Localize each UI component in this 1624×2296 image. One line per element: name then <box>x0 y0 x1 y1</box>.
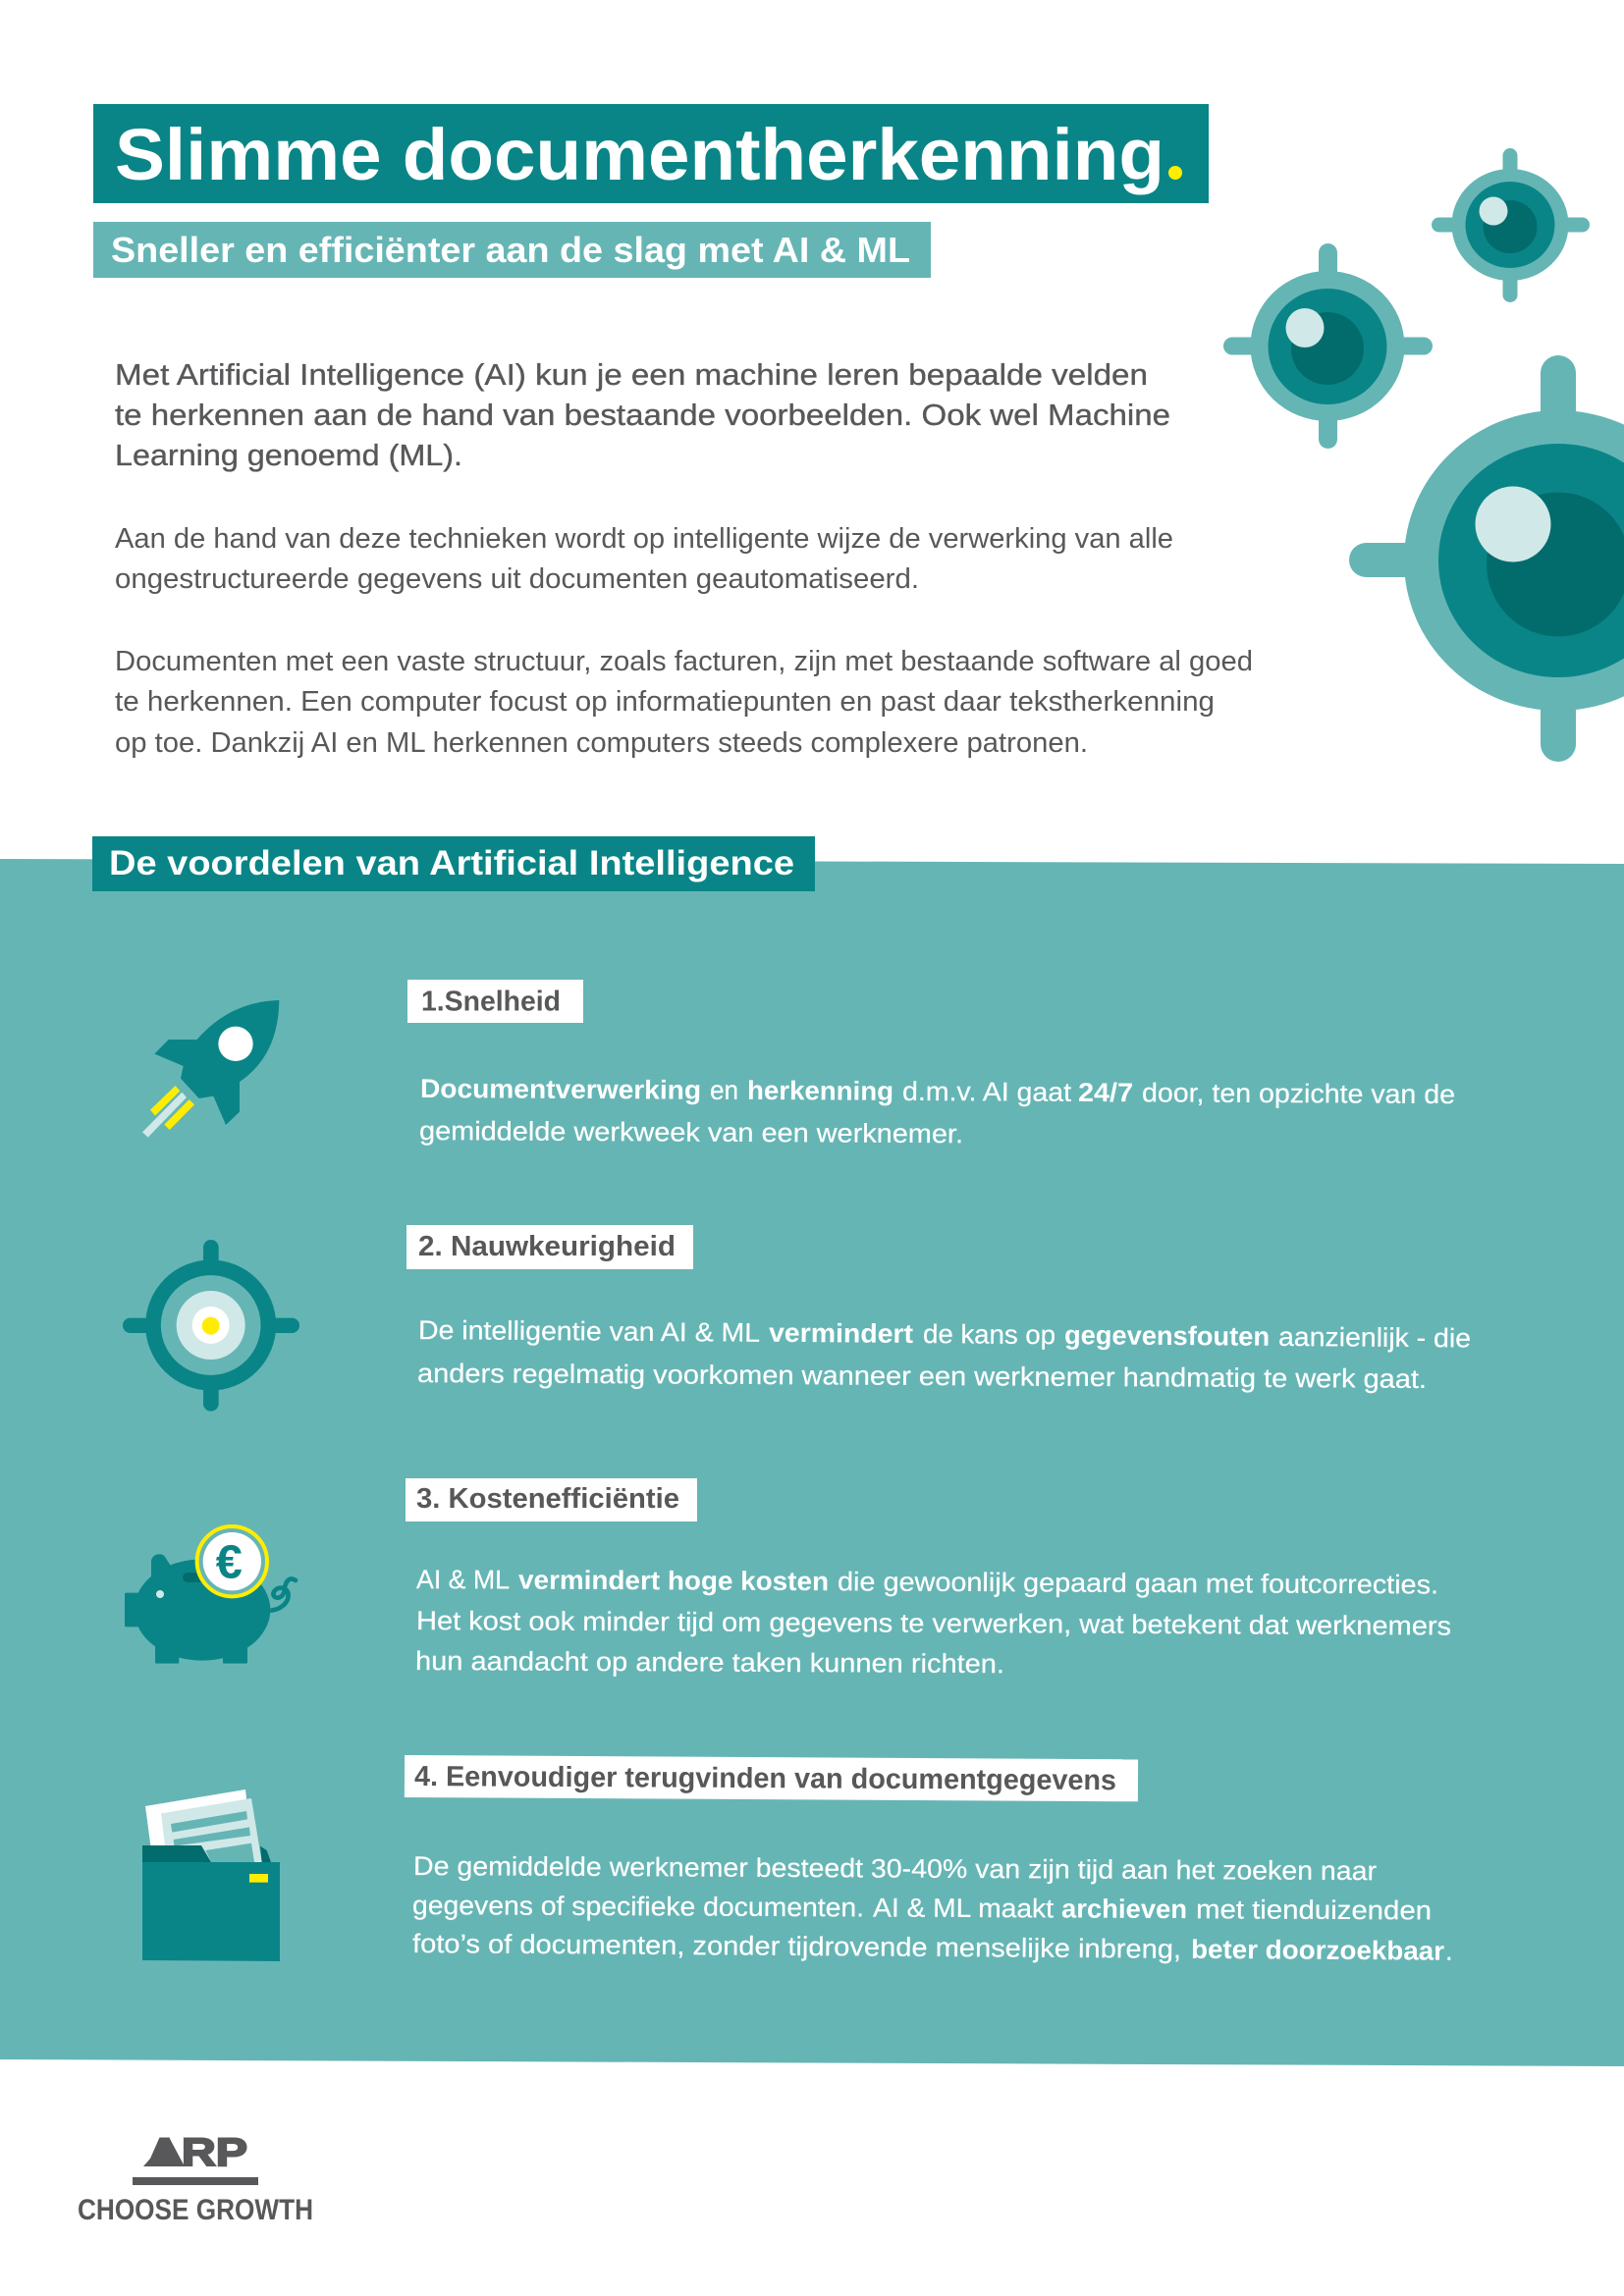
subtitle banner <box>93 222 931 278</box>
intro text block <box>115 357 1170 472</box>
text: terugvinden description: gegevens of specifieke documenten. <box>412 1891 864 1922</box>
heading: 4. Eenvoudiger terugvinden: 4. Eenvoudiger terugvinden van documentgegevens <box>414 1761 1116 1796</box>
text: terugvinden description: foto’s of documenten, zonder tijdrovende menselijke inbreng, <box>412 1929 1181 1964</box>
text: Kostenefficiëntie description: hun aandacht op andere taken kunnen richten. <box>415 1646 1004 1679</box>
logo: ARP Choose Growth: CHOOSE GROWTH <box>78 2194 313 2226</box>
paragraph: documents <box>115 646 1253 759</box>
text: Nauwkeurigheid description: gegevensfouten <box>1064 1320 1270 1352</box>
icon: rocket <box>142 1000 279 1138</box>
text: Snelheid description <box>419 1074 1455 1148</box>
logo: ARP Choose Growth <box>78 2131 313 2226</box>
text: terugvinden description <box>412 1851 1453 1966</box>
intro text block: te herkennen aan de hand van bestaande voorbeelden. Ook wel Machine <box>115 398 1170 432</box>
teal benefits panel background <box>0 859 1624 2066</box>
paragraph: documents: op toe. Dankzij AI en ML herkennen computers steeds complexere patronen. <box>115 727 1088 759</box>
paragraph: documents: te herkennen. Een computer focust op informatiepunten en past daar tekstherkenning <box>115 686 1215 718</box>
text: Nauwkeurigheid description: De intelligentie van AI & ML <box>418 1315 760 1348</box>
heading: 3. Kostenefficiëntie: 3. Kostenefficiëntie <box>416 1483 679 1515</box>
text: terugvinden description: . <box>1445 1937 1453 1966</box>
text: terugvinden description: met tienduizenden <box>1196 1895 1432 1925</box>
text: Snelheid description: Documentverwerking <box>420 1074 701 1105</box>
icon: piggy bank with euro coin <box>125 1526 296 1664</box>
title banner: Slimme documentherkenning <box>115 114 1164 195</box>
paragraph: techniques: ongestructureerde gegevens uit documenten geautomatiseerd. <box>115 563 919 595</box>
text: terugvinden description: AI & ML maakt <box>873 1893 1055 1923</box>
section heading banner: De voordelen van Artificial Intelligence <box>109 843 794 882</box>
text: Kostenefficiëntie description: die gewoonlijk gepaard gaan met foutcorrecties. <box>838 1567 1438 1599</box>
subtitle banner: Sneller en efficiënter aan de slag met AI & ML <box>111 230 910 270</box>
text: Kostenefficiëntie description: vermindert hoge kosten <box>518 1566 829 1596</box>
logo: ARP Choose Growth: ARP <box>147 2131 247 2174</box>
text: Nauwkeurigheid description: anders regelmatig voorkomen wanneer een werknemer handmatig te werk gaat. <box>417 1359 1427 1394</box>
paragraph: techniques <box>115 523 1173 595</box>
heading: 2. Nauwkeurigheid <box>406 1225 693 1269</box>
text: Snelheid description: d.m.v. AI gaat <box>902 1077 1072 1107</box>
heading: 3. Kostenefficiëntie <box>406 1478 697 1522</box>
icon: piggy bank with euro coin: € <box>216 1536 243 1589</box>
heading: 1. Snelheid <box>407 980 583 1023</box>
text: Nauwkeurigheid description: de kans op <box>923 1319 1056 1350</box>
text: terugvinden description: De gemiddelde werknemer besteedt 30-40% van zijn tijd aan het zoeken naar <box>413 1851 1377 1886</box>
text: Snelheid description: herkenning <box>747 1076 893 1106</box>
intro text block: Learning genoemd (ML). <box>115 438 462 472</box>
text: Kostenefficiëntie description <box>415 1565 1451 1679</box>
icon: medium target <box>1223 243 1433 449</box>
icon: folder with documents <box>142 1789 280 1961</box>
section heading banner <box>92 836 815 891</box>
text: terugvinden description: archieven <box>1061 1894 1187 1924</box>
heading: 2. Nauwkeurigheid: 2. Nauwkeurigheid <box>418 1231 676 1262</box>
text: terugvinden description: beter doorzoekbaar <box>1191 1935 1445 1966</box>
intro text block: Met Artificial Intelligence (AI) kun je een machine leren bepaalde velden <box>115 357 1148 392</box>
text: Kostenefficiëntie description: AI & ML <box>416 1565 510 1594</box>
text: Snelheid description: en <box>710 1076 738 1105</box>
paragraph: techniques: Aan de hand van deze technieken wordt op intelligente wijze de verwerking van alle <box>115 523 1173 555</box>
icon: small target top right <box>1432 148 1590 302</box>
text: Kostenefficiëntie description: Het kost ook minder tijd om gegevens te verwerken, wat betekent dat werknemers <box>416 1606 1451 1641</box>
text: Nauwkeurigheid description <box>417 1315 1471 1394</box>
text: Nauwkeurigheid description: vermindert <box>769 1318 913 1349</box>
text: Nauwkeurigheid description: aanzienlijk - die <box>1278 1322 1471 1353</box>
icon: large target cropped at right edge <box>1349 355 1624 762</box>
heading: 1. Snelheid: 1.Snelheid <box>421 986 561 1017</box>
text: Snelheid description: gemiddelde werkweek van een werknemer. <box>419 1116 963 1148</box>
paragraph: documents: Documenten met een vaste structuur, zoals facturen, zijn met bestaande software al goed <box>115 646 1253 677</box>
icon: target <box>123 1240 299 1412</box>
text: Snelheid description: door, ten opzichte van de <box>1142 1078 1455 1109</box>
text: Snelheid description: 24/7 <box>1078 1078 1133 1107</box>
